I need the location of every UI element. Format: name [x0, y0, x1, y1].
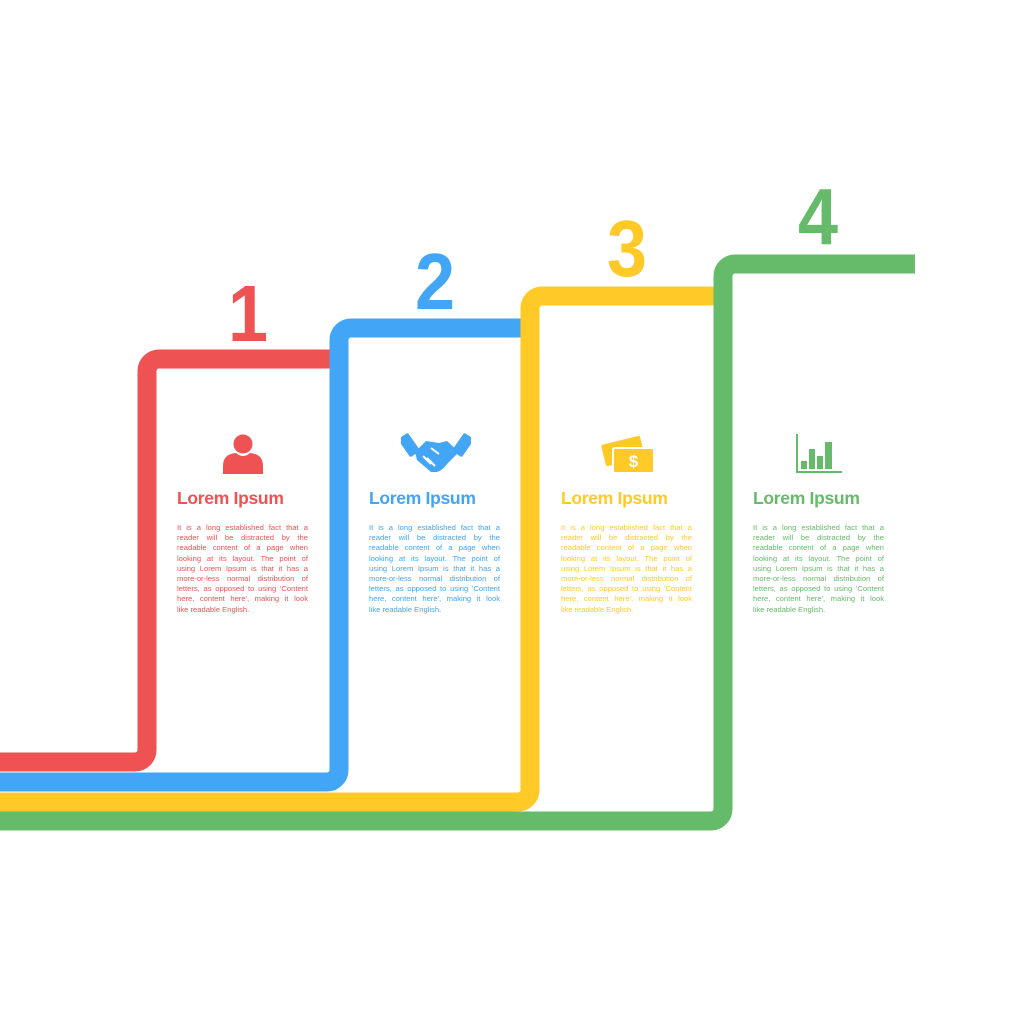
text block 4: readable content of a page when: [753, 543, 884, 552]
icon: money: [601, 436, 653, 472]
icon: person: [223, 434, 263, 474]
text block 2: Lorem Ipsum: [369, 488, 476, 508]
text block 1: It is a long established fact that a: [177, 523, 308, 532]
text block 1: readable content of a page when: [177, 543, 308, 552]
icon: money: $: [629, 452, 639, 471]
text block 4: using Lorem Ipsum is that it has a: [753, 564, 884, 573]
text block 1: using Lorem Ipsum is that it has a: [177, 564, 308, 573]
line: green step: [0, 264, 915, 821]
text block 3: like readable English.: [561, 604, 633, 614]
text block 2: reader will be distracted by the: [369, 533, 500, 542]
text block 2: here, content here', making it look: [369, 594, 500, 603]
number 3: 3: [607, 204, 647, 293]
text block 3: looking at its layout. The point of: [561, 554, 692, 563]
text block 1: letters, as opposed to using 'Content: [177, 584, 308, 593]
icon: bar chart: [796, 434, 842, 473]
text block 1: like readable English.: [177, 604, 249, 614]
text block 2: looking at its layout. The point of: [369, 554, 500, 563]
text block 1: here, content here', making it look: [177, 594, 308, 603]
text block 2: like readable English.: [369, 604, 441, 614]
text block 2: letters, as opposed to using 'Content: [369, 584, 500, 593]
text block 4: letters, as opposed to using 'Content: [753, 584, 884, 593]
text block 3: reader will be distracted by the: [561, 533, 692, 542]
number 1: 1: [228, 269, 268, 358]
text block 2: readable content of a page when: [369, 543, 500, 552]
line: red step: [0, 359, 336, 762]
text block 2: [369, 488, 500, 614]
text block 4: looking at its layout. The point of: [753, 554, 884, 563]
text block 2: It is a long established fact that a: [369, 523, 500, 532]
text block 2: more-or-less normal distribution of: [369, 574, 500, 583]
text block 1: reader will be distracted by the: [177, 533, 308, 542]
text block 3: readable content of a page when: [561, 543, 692, 552]
text block 3: more-or-less normal distribution of: [561, 574, 692, 583]
text block 2: using Lorem Ipsum is that it has a: [369, 564, 500, 573]
text block 4: like readable English.: [753, 604, 825, 614]
text block 3: here, content here', making it look: [561, 594, 692, 603]
text block 4: Lorem Ipsum: [753, 488, 860, 508]
text block 3: Lorem Ipsum: [561, 488, 668, 508]
text block 3: It is a long established fact that a: [561, 523, 692, 532]
icon: handshake: [401, 433, 471, 472]
text block 3: [561, 488, 692, 614]
number 2: 2: [415, 237, 455, 326]
line: yellow step: [0, 296, 720, 802]
text block 1: [177, 488, 308, 614]
line: blue step: [0, 328, 528, 782]
number 4: 4: [798, 172, 838, 261]
text block 1: looking at its layout. The point of: [177, 554, 308, 563]
text block 4: here, content here', making it look: [753, 594, 884, 603]
text block 1: Lorem Ipsum: [177, 488, 284, 508]
text block 4: more-or-less normal distribution of: [753, 574, 884, 583]
text block 4: reader will be distracted by the: [753, 533, 884, 542]
text block 3: using Lorem Ipsum is that it has a: [561, 564, 692, 573]
text block 1: more-or-less normal distribution of: [177, 574, 308, 583]
text block 4: It is a long established fact that a: [753, 523, 884, 532]
text block 4: [753, 488, 884, 614]
text block 3: letters, as opposed to using 'Content: [561, 584, 692, 593]
